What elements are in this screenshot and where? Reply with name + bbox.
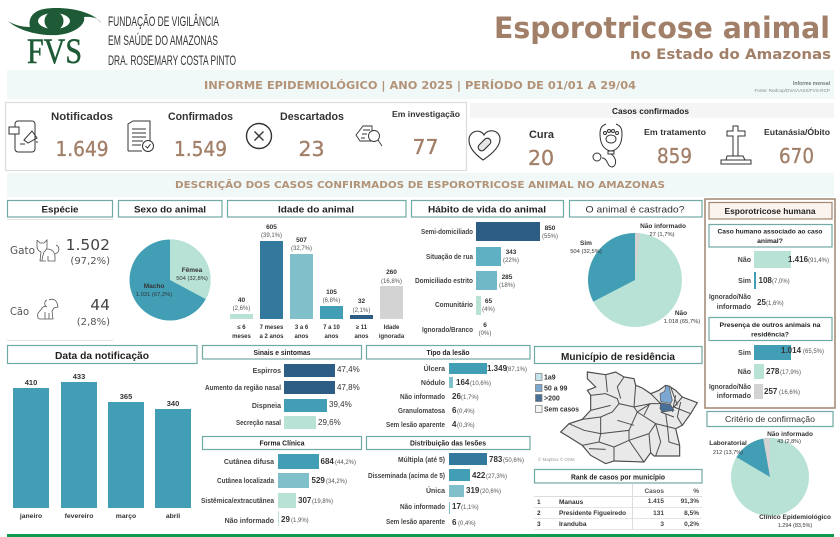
Em tratamento — [644, 127, 706, 168]
bar chart: hábito: (4%) — [482, 307, 495, 313]
bar chart: distribuição: 783 — [489, 455, 503, 464]
bar chart: forma clínica: Cutânea difusa — [224, 459, 274, 466]
bar chart: tipo da lesão: Nódulo — [421, 380, 445, 387]
pie chart: sexo: Fêmea — [182, 267, 203, 274]
Em tratamento: Em tratamento — [644, 127, 706, 137]
bar chart: distribuição: 319 — [466, 486, 480, 495]
bar chart: outros animais: 257 — [764, 387, 778, 396]
bar chart: idade: 260 — [386, 269, 397, 276]
heading: casos confirmados — [470, 103, 834, 118]
bar chart: tipo da lesão: (0,3%) — [457, 423, 475, 429]
bar chart: hábito: (0%) — [479, 331, 491, 337]
panel: data da notificação — [8, 346, 197, 520]
bar chart: meses: 340 — [167, 399, 179, 408]
bar chart: sinais: Espirros — [253, 368, 281, 375]
bar chart: idade: anos — [324, 334, 339, 340]
Descartados — [280, 111, 344, 161]
report band: Informe mensal — [793, 81, 831, 87]
subheading: caso humano: animal? — [757, 238, 783, 245]
pie chart: critério: 212 (13,7%) — [713, 450, 743, 456]
bar chart: distribuição: 17 — [452, 502, 461, 511]
pie chart: sexo — [130, 240, 210, 320]
bar chart: forma clínica: (44,2%) — [335, 460, 356, 466]
subheading: outros animais — [709, 318, 832, 340]
bar chart: caso humano: Sim — [738, 278, 751, 285]
map: Amazonas — [561, 372, 697, 464]
logo FVS: FVS — [27, 31, 82, 71]
bar chart: meses: 365 — [120, 392, 132, 401]
cão: Cão — [10, 306, 29, 318]
panel: notification totals — [6, 102, 466, 170]
Confirmados: Confirmados — [168, 111, 233, 123]
Confirmados: 1.549 — [174, 137, 227, 161]
heading: Critério de confirmação — [725, 414, 815, 424]
logo institution name: EM SAÚDE DO AMAZONAS — [108, 32, 218, 48]
panel: sexo do animal — [118, 200, 222, 320]
Cura: Cura — [529, 129, 555, 141]
bar chart: idade: 605 — [266, 224, 277, 231]
heading — [534, 470, 702, 483]
bar chart: caso humano: (91,4%) — [808, 258, 829, 264]
panel: tipo da lesão — [366, 346, 530, 429]
bar chart: forma clínica: (34,2%) — [326, 479, 347, 485]
heading — [8, 346, 197, 364]
bar chart: sinais: 39,4% — [329, 400, 352, 409]
bar chart: distribuição: Única — [426, 486, 445, 495]
table: rank: 3 — [660, 521, 664, 528]
panel: município de residência — [534, 346, 702, 464]
bar chart: sinais: 47,4% — [337, 365, 360, 374]
icon: phone with bell — [9, 121, 38, 152]
bar chart: tipo da lesão: 6 — [452, 406, 457, 415]
logo FVS — [8, 8, 101, 71]
table: rank — [534, 484, 702, 530]
Em investigação: Em investigação — [392, 109, 460, 119]
bar chart: idade: 40 — [238, 297, 245, 304]
pie chart: critério: Laboratorial — [709, 440, 747, 447]
bar chart: idade: Idade — [384, 325, 400, 331]
pie chart: castrado: Não — [675, 310, 687, 317]
section band: DESCRIÇÃO DOS CASOS CONFIRMADOS DE ESPOROTRICOSE ANIMAL NO AMAZONAS — [175, 178, 665, 191]
bar chart: forma clínica: Sistêmica/extracutânea — [201, 498, 274, 505]
pie chart: castrado: 1.018 (65,7%) — [664, 319, 700, 325]
heading — [534, 346, 702, 364]
pie chart: critério: 1.294 (83,5%) — [778, 523, 812, 529]
bar chart: hábito — [415, 222, 558, 337]
heading — [412, 200, 564, 217]
bar chart: caso humano: Ignorado/Não — [709, 294, 751, 301]
bar chart: outros animais — [709, 345, 824, 400]
pie chart: castrado: Não informado — [640, 223, 686, 230]
table: rank: 131 — [653, 510, 664, 517]
pie chart: critério: Não informado — [767, 431, 813, 438]
bar chart: hábito: 65 — [485, 298, 492, 305]
footer bar — [7, 534, 834, 537]
Notificados: Notificados — [51, 111, 113, 123]
bar chart: hábito: 343 — [506, 249, 517, 256]
bar chart: distribuição: Múltipla (até 5) — [398, 457, 445, 464]
bar chart: idade: (32,7%) — [291, 246, 312, 252]
bar chart: tipo da lesão: Úlcera — [424, 364, 445, 373]
bar chart: caso humano: (1,6%) — [766, 301, 784, 307]
heading: Sinais e sintomas — [254, 350, 311, 357]
bar chart: sinais: 29,6% — [318, 418, 341, 427]
panel: forma clínica — [201, 436, 362, 526]
bar chart: caso humano: informado — [717, 304, 751, 311]
Eutanásia/Óbito: Eutanásia/Óbito — [764, 126, 830, 137]
pie chart: sexo: Macho — [144, 283, 164, 290]
bar chart: hábito: (18%) — [499, 283, 515, 289]
bar chart: idade: 7 a 10 — [323, 325, 341, 331]
table: rank: 8,5% — [684, 510, 699, 517]
bar chart: outros animais: Ignorado/Não — [709, 384, 751, 391]
heading: Município de residência — [561, 352, 675, 363]
Notificados: 1.649 — [56, 137, 108, 161]
pie chart: castrado: 504 (32,5%) — [570, 249, 602, 255]
bar chart: idade: 3 a 6 — [295, 325, 309, 331]
bar chart: idade: anos — [294, 334, 309, 340]
bar chart: distribuição: (1,1%) — [461, 505, 479, 511]
bar chart: distribuição: (0,4%) — [458, 521, 476, 527]
Cura: 20 — [528, 146, 554, 170]
bar chart: forma clínica: (1,9%) — [291, 518, 309, 524]
heading — [8, 200, 112, 217]
pie chart: critério: 43 (2,8%) — [777, 439, 801, 445]
heading: O animal é castrado? — [586, 204, 684, 216]
bar chart: distribuição — [368, 453, 524, 527]
bar chart: outros animais: 1.014 — [781, 346, 802, 355]
gato: (97,2%) — [70, 256, 110, 267]
bar chart: idade — [230, 224, 405, 340]
bar chart: meses: março — [116, 513, 136, 520]
bar chart: distribuição: Não informado — [400, 504, 445, 511]
subtitle: no Estado do Amazonas — [630, 47, 831, 63]
pie chart: sexo: 1.031 (67,2%) — [136, 292, 172, 298]
pie chart: castrado: Sim — [580, 240, 592, 247]
bar chart: idade: 7 meses — [260, 325, 284, 331]
logo institution name — [108, 13, 236, 68]
heading: Hábito de vida do animal — [428, 204, 546, 216]
Descartados: Descartados — [280, 111, 344, 123]
subheading: caso humano: Caso humano associado ao caso — [718, 228, 822, 236]
table: rank: 0,2% — [684, 521, 699, 528]
bar chart: distribuição: (50,6%) — [503, 458, 524, 464]
bar chart: hábito: Semi-domiciliado — [421, 229, 473, 236]
table: rank: 2 — [537, 510, 541, 517]
icon: heart with bandage — [469, 131, 500, 160]
bar chart: hábito: Situação de rua — [426, 254, 473, 261]
bar chart: tipo da lesão: 26 — [452, 392, 461, 401]
icon: grave cross — [721, 126, 751, 164]
bar chart: idade: a 2 anos — [259, 334, 284, 340]
heading: Idade do animal — [278, 204, 354, 216]
heading: Rank de casos por município — [571, 474, 665, 482]
bar chart: distribuição: 422 — [472, 471, 486, 480]
bar chart: idade: ignorada — [379, 334, 405, 340]
bar chart: hábito: (22%) — [503, 258, 519, 264]
bar chart: idade: 507 — [296, 237, 307, 244]
bar chart: idade: meses — [232, 334, 252, 340]
heading: Data da notificação — [55, 350, 149, 362]
heading: Sexo do animal — [134, 204, 206, 216]
panel: esporotricose humana — [705, 199, 835, 408]
subheading: outros animais: Presença de outros animais na — [720, 322, 821, 329]
report band: Fonte: Redcap/DVA/AASS/FVS-RCP — [754, 88, 830, 93]
table: rank: Casos — [644, 488, 664, 495]
bar chart: distribuição: Disseminada (acima de 5) — [368, 473, 445, 480]
report band: INFORME EPIDEMIOLÓGICO | ANO 2025 | PERÍODO DE 01/01 A 29/04 — [204, 79, 636, 92]
panel: confirmed case outcomes — [469, 103, 834, 170]
heading: Distribuição das lesões — [410, 440, 486, 448]
Cura — [528, 129, 555, 170]
bar chart: tipo da lesão: 164 — [456, 378, 470, 387]
heading — [709, 202, 832, 219]
bar chart: sinais: Secreção nasal — [236, 420, 281, 427]
Em investigação — [392, 109, 460, 159]
Em investigação: 77 — [412, 135, 439, 159]
table: rank: Iranduba — [559, 521, 587, 528]
bar chart: forma clínica: 307 — [298, 496, 312, 505]
bar chart: hábito: Comunitário — [435, 302, 473, 309]
bar chart: tipo da lesão: (87,1%) — [506, 367, 527, 373]
bar chart: hábito: (55%) — [542, 234, 558, 240]
Descartados: 23 — [298, 137, 325, 161]
Eutanásia/Óbito: 670 — [779, 144, 814, 168]
bar chart: tipo da lesão: 1.349 — [487, 364, 508, 373]
bar chart: tipo da lesão: Sem lesão aparente — [386, 422, 445, 429]
bar chart: idade: ≥ 11 — [356, 325, 368, 331]
Notificados — [51, 111, 113, 161]
bar chart: sinais: 47,8% — [337, 383, 360, 392]
panel: idade do animal — [228, 200, 406, 340]
bar chart: tipo da lesão: 4 — [452, 420, 457, 429]
logo institution name: DRA. ROSEMARY COSTA PINTO — [108, 52, 236, 68]
icon: document with check — [128, 121, 154, 152]
bar chart: forma clínica: 684 — [320, 457, 334, 466]
map legend: 1a9 — [544, 374, 556, 382]
panel: critério de confirmação — [707, 412, 833, 529]
gato: Gato — [10, 245, 35, 257]
bar chart: outros animais: (17,9%) — [780, 370, 801, 376]
panel: espécie — [7, 200, 113, 341]
panel: distribuição das lesões — [366, 436, 530, 527]
Confirmados — [168, 111, 233, 161]
subheading: caso humano — [709, 224, 832, 247]
pie chart: critério — [709, 431, 831, 529]
table: rank: Manaus — [559, 499, 584, 506]
panel: rank de casos por município — [534, 470, 702, 530]
icon: cat — [37, 240, 59, 261]
bar chart: tipo da lesão: Não informado — [400, 394, 445, 401]
bar chart: caso humano: 1.416 — [788, 255, 809, 264]
bar chart: idade: (39,1%) — [261, 233, 282, 239]
bar chart: idade: (16,8%) — [381, 279, 402, 285]
heading: Forma Clínica — [260, 440, 305, 448]
map legend — [536, 374, 579, 414]
bar chart: tipo da lesão — [386, 363, 527, 429]
gato — [10, 236, 110, 267]
heading — [366, 346, 530, 359]
bar chart: distribuição: (20,6%) — [480, 489, 501, 495]
pie chart: castrado — [570, 223, 700, 327]
bar chart: sinais — [205, 364, 360, 429]
Em tratamento: 859 — [657, 144, 692, 168]
gato: 1.502 — [66, 236, 110, 254]
panel: sinais e sintomas — [202, 346, 362, 429]
bar chart: meses: 433 — [73, 372, 85, 381]
bar chart: idade: (2,6%) — [233, 306, 250, 312]
table: rank: % — [693, 488, 699, 495]
bar chart: idade: anos — [354, 334, 369, 340]
Eutanásia/Óbito — [764, 126, 830, 168]
bar chart: hábito: 285 — [502, 274, 513, 281]
bar chart: caso humano: (7,0%) — [772, 279, 790, 285]
subheading: outros animais: residência? — [751, 332, 789, 338]
bar chart: distribuição: 6 — [452, 518, 457, 527]
bar chart: caso humano: 25 — [757, 298, 766, 307]
bar chart: idade: (2,1%) — [353, 308, 370, 314]
bar chart: outros animais: 278 — [766, 367, 780, 376]
heading — [228, 200, 406, 217]
map legend: Sem casos — [544, 406, 579, 414]
bar chart: outros animais: Não — [738, 369, 751, 376]
bar chart: distribuição: (27,3%) — [486, 474, 507, 480]
panel: castrado — [570, 200, 702, 327]
title: Esporotricose animal — [494, 11, 830, 45]
table: rank: Presidente Figueiredo — [559, 510, 626, 517]
bar chart: meses: fevereiro — [65, 513, 93, 520]
icon: dog — [38, 299, 58, 319]
bar chart: outros animais: Sim — [738, 350, 751, 357]
icon: stethoscope with paw — [593, 124, 622, 167]
bar chart: tipo da lesão: (0,4%) — [457, 409, 475, 415]
bar chart: meses — [13, 372, 191, 520]
bar chart: idade: 32 — [358, 298, 365, 305]
pie chart: castrado: 27 (1,7%) — [649, 232, 675, 238]
heading: Espécie — [42, 204, 78, 216]
heading — [202, 346, 362, 359]
cão: 44 — [90, 296, 110, 314]
report band — [7, 70, 834, 99]
cão: (2,8%) — [77, 317, 110, 328]
heading: casos confirmados: Casos confirmados — [612, 106, 689, 116]
bar chart: forma clínica: 529 — [312, 476, 325, 485]
bar chart: tipo da lesão: (10,6%) — [470, 381, 491, 387]
bar chart: hábito: 850 — [545, 225, 556, 232]
bar chart: meses: janeiro — [19, 513, 42, 520]
bar chart: tipo da lesão: (1,7%) — [461, 395, 479, 401]
table: rank: 1.415 — [648, 498, 664, 505]
bar chart: idade: (6,8%) — [323, 298, 340, 304]
bar chart: caso humano: Não — [738, 257, 751, 264]
heading — [202, 436, 362, 450]
map attribution: © Mapbox © OSM — [538, 456, 575, 462]
pie chart: critério: Clínico Epidemiológico — [759, 514, 831, 521]
bar chart: forma clínica: 29 — [281, 515, 290, 524]
bar chart: caso humano — [709, 251, 829, 311]
bar chart: outros animais: (16,6%) — [779, 390, 800, 396]
heading — [366, 436, 530, 450]
section band — [7, 173, 834, 197]
table: rank: 1 — [537, 499, 541, 506]
bar chart: distribuição: Sem lesão aparente — [386, 519, 445, 526]
pie chart: sexo: 504 (32,8%) — [176, 276, 208, 282]
bar chart: sinais: Aumento da região nasal — [205, 385, 281, 392]
table: rank: 91,3% — [681, 498, 699, 505]
bar chart: meses: abril — [166, 513, 180, 520]
bar chart: meses: 410 — [25, 378, 37, 387]
bar chart: tipo da lesão: Granulomatosa — [398, 408, 445, 415]
bar chart: sinais: Dispneia — [252, 403, 281, 410]
heading: Esporotricose humana — [724, 206, 816, 216]
bar chart: outros animais: informado — [717, 393, 751, 400]
map legend: >200 — [544, 396, 560, 402]
icon: circled x — [246, 124, 272, 148]
panel: hábito de vida — [412, 200, 564, 337]
bar chart: hábito: 6 — [483, 322, 487, 329]
bar chart: forma clínica: Cutânea localizada — [217, 478, 274, 485]
bar chart: hábito: Domiciliado estrito — [415, 278, 473, 285]
bar chart: idade: 105 — [326, 289, 337, 296]
heading: Tipo da lesão — [426, 350, 470, 357]
map legend: 50 a 99 — [544, 386, 567, 392]
bar chart: caso humano: 108 — [758, 276, 772, 285]
bar chart: forma clínica: (19,8%) — [312, 499, 333, 505]
bar chart: idade: ≤ 6 — [237, 325, 246, 331]
bar chart: hábito: Ignorado/Branco — [422, 327, 473, 334]
cão — [10, 296, 110, 328]
bar chart: outros animais: (65,5%) — [803, 349, 824, 355]
table: rank: 3 — [537, 521, 541, 528]
icon: clipboard with magnifier — [356, 126, 382, 146]
bar chart: forma clínica: Não informado — [225, 518, 274, 525]
bar chart: forma clínica — [201, 454, 356, 526]
logo institution name: FUNDAÇÃO DE VIGILÂNCIA — [108, 13, 219, 29]
